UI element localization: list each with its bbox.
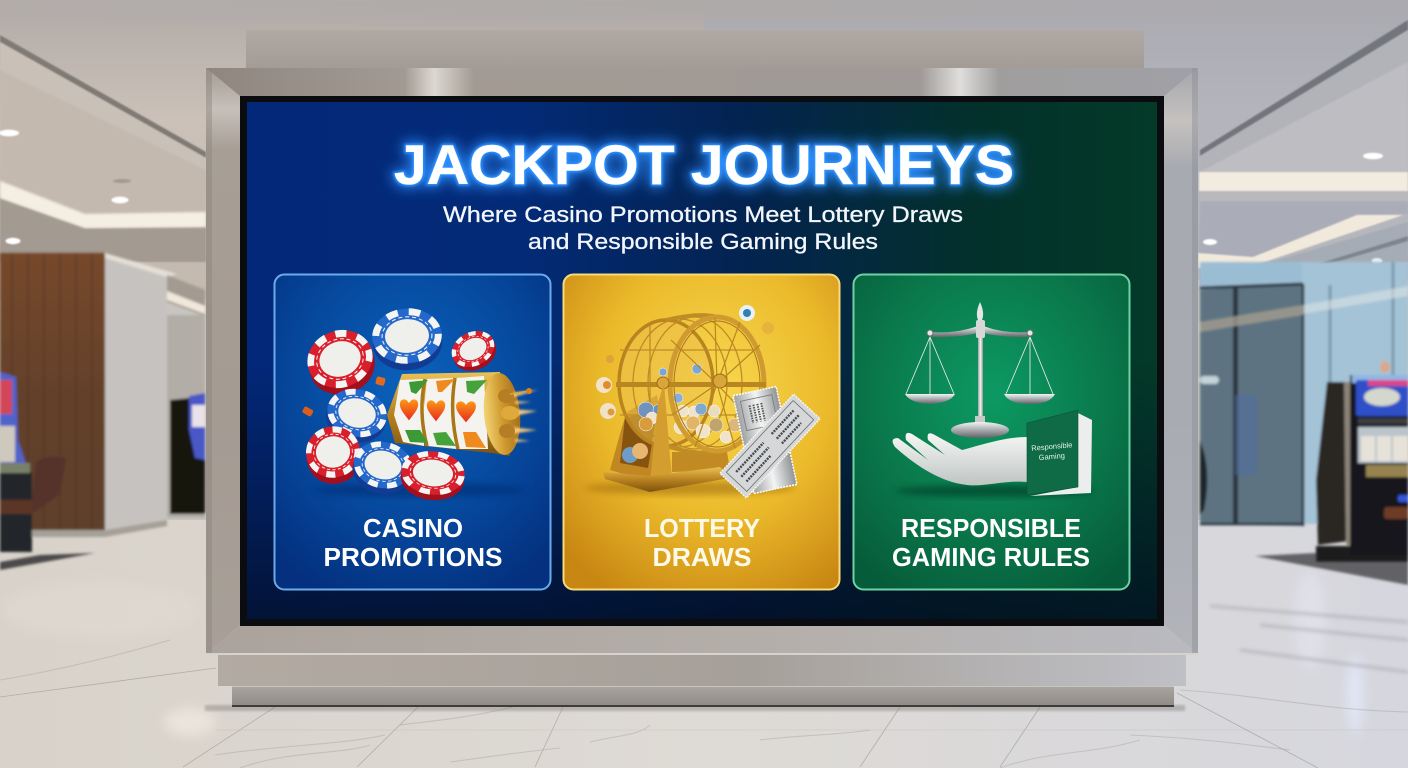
slot machine reels: [387, 372, 538, 456]
subtitle: and Responsible Gaming Rules: [528, 229, 878, 254]
label: lottery draws: DRAWS: [652, 544, 752, 572]
loose balls: [596, 305, 774, 463]
rule book: Responsible: [1031, 440, 1073, 453]
floor tile joints and marble veins: [0, 668, 1408, 768]
title: Jackpot Journeys: JACKPOT JOURNEYS: [394, 133, 1014, 196]
balance scales: [905, 302, 1055, 438]
panel: casino promotions: [274, 274, 550, 590]
floor: [0, 520, 1408, 768]
label: responsible gaming rules: RESPONSIBLE: [901, 515, 1081, 543]
left wall: [0, 253, 205, 570]
icon: balance scales, hand and rule book: [893, 302, 1095, 497]
screen: [240, 96, 1164, 626]
panel: responsible gaming rules: [854, 274, 1130, 590]
rule book: [1027, 410, 1092, 496]
base plinth and column: [603, 383, 730, 492]
subtitle: Where Casino Promotions Meet Lottery Draws: [443, 202, 963, 227]
label: casino promotions: [324, 515, 502, 572]
title: Jackpot Journeys: JACKPOT JOURNEYS: [394, 133, 1014, 196]
drum stand: [610, 395, 730, 482]
subtitle: [443, 202, 963, 254]
icon: casino chips and slot reels: [300, 306, 538, 503]
icon: lottery drum and tickets: [585, 305, 820, 498]
label: responsible gaming rules: [892, 515, 1090, 572]
ceiling: [0, 0, 704, 300]
title: Jackpot Journeys: JACKPOT JOURNEYS: [394, 133, 1014, 196]
label: lottery draws: LOTTERY: [644, 515, 760, 543]
rule book: Gaming: [1038, 451, 1065, 462]
signage frame: [205, 30, 1198, 711]
right room: [1200, 262, 1408, 585]
right cove lights: [1198, 153, 1408, 268]
label: responsible gaming rules: GAMING RULES: [892, 544, 1090, 572]
open hand: [893, 433, 1027, 485]
label: casino promotions: PROMOTIONS: [324, 544, 502, 572]
panel: lottery draws: [564, 274, 840, 590]
left cove light: [0, 181, 206, 228]
lottery balls: [638, 364, 742, 443]
label: casino promotions: CASINO: [363, 515, 463, 543]
tickets: [720, 387, 820, 498]
label: lottery draws: [644, 515, 760, 572]
